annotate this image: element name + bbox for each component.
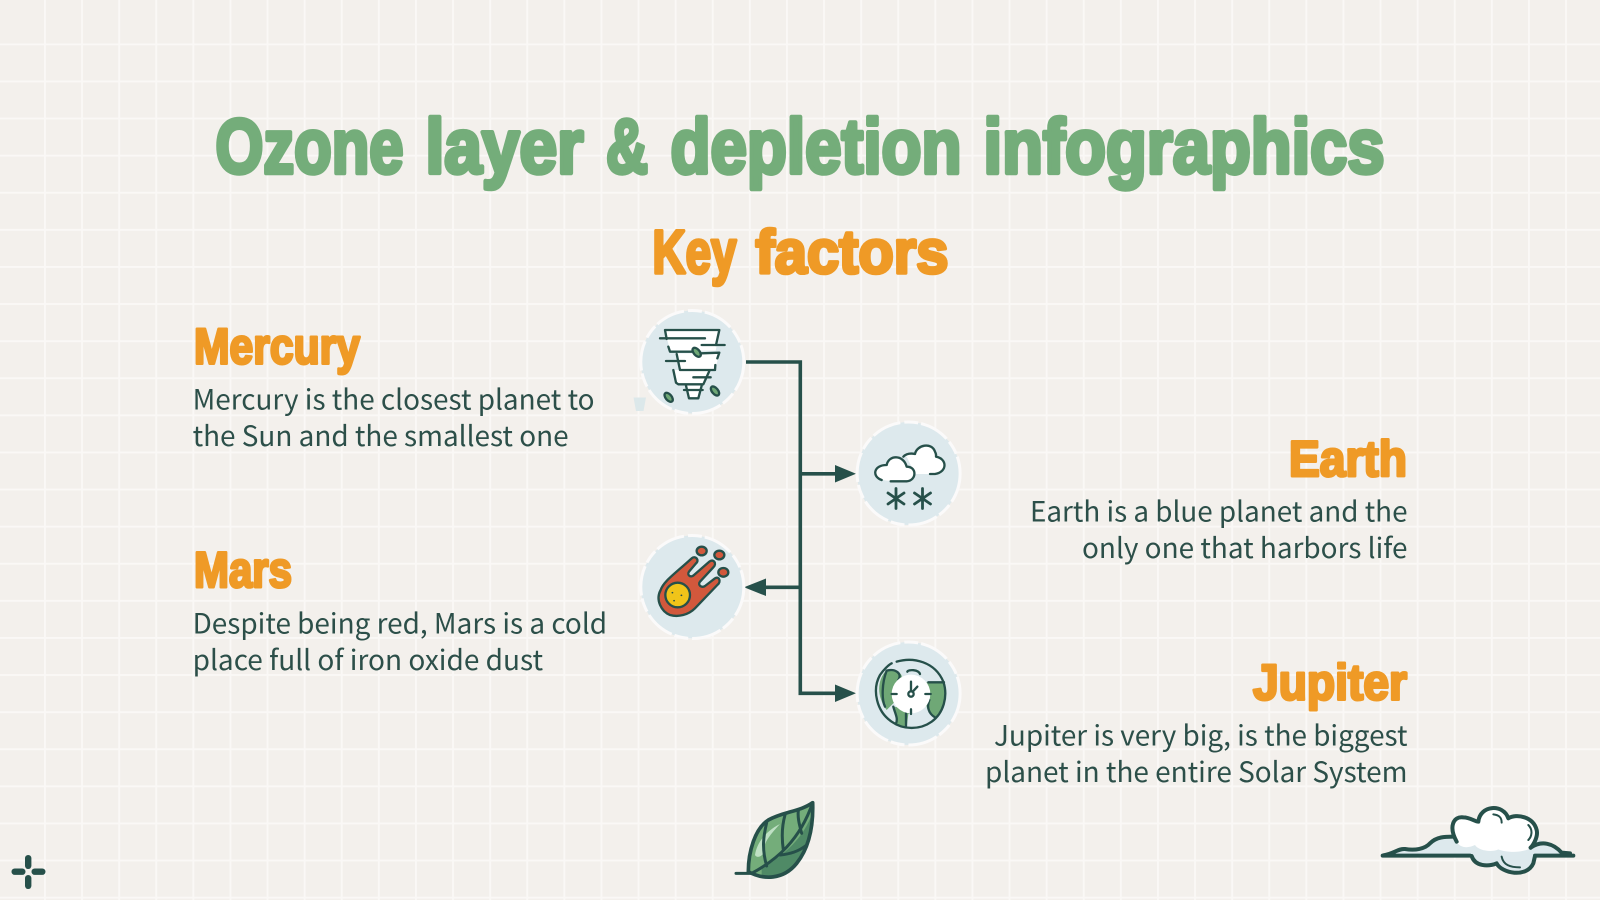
text block: Earth: Earth	[1289, 430, 1407, 487]
text block: Mars: Despite being red, Mars is a cold	[193, 602, 607, 642]
connector lines	[746, 362, 838, 693]
icon: snow clouds	[857, 422, 960, 525]
subtitle: key factors: factors	[756, 218, 948, 286]
text block: Mercury: Mercury is the closest planet to	[193, 378, 595, 418]
arrow: to Jupiter	[835, 684, 856, 702]
title: infographics	[984, 104, 1384, 190]
text block: Mercury: Mercury	[194, 318, 360, 374]
title: &	[606, 104, 648, 190]
arrow: to Earth	[835, 465, 856, 482]
text block: Jupiter: planet in the entire Solar System	[985, 751, 1408, 791]
icon: cloud	[1383, 808, 1573, 873]
text block: Earth: Earth is a blue planet and the	[1030, 490, 1408, 530]
text block: Jupiter: Jupiter	[1253, 654, 1407, 710]
text block: Mars: Mars	[194, 541, 292, 598]
text block: Jupiter: Jupiter is very big, is the biggest	[994, 714, 1408, 754]
text block: Mars: place full of iron oxide dust	[193, 639, 544, 679]
text block: Earth	[1030, 430, 1408, 567]
title: depletion	[670, 104, 962, 190]
subtitle: key factors: Key	[652, 218, 737, 286]
icon: four-point sparkle	[12, 855, 46, 889]
text block: Earth: only one that harbors life	[1082, 527, 1408, 567]
icon: comet	[641, 536, 744, 638]
icon: earth with clock	[857, 642, 960, 745]
text block: Mercury	[193, 318, 595, 455]
text block: Jupiter	[985, 654, 1408, 791]
icon: leaf	[736, 803, 813, 877]
title: layer	[426, 104, 584, 190]
icon: tornado	[641, 310, 744, 414]
text block: Mars	[193, 541, 607, 679]
text block: Mercury: the Sun and the smallest one	[193, 415, 569, 455]
arrow: to Mars	[744, 578, 766, 596]
decorative pale trapezoid	[634, 398, 646, 411]
title: Ozone	[216, 104, 404, 190]
